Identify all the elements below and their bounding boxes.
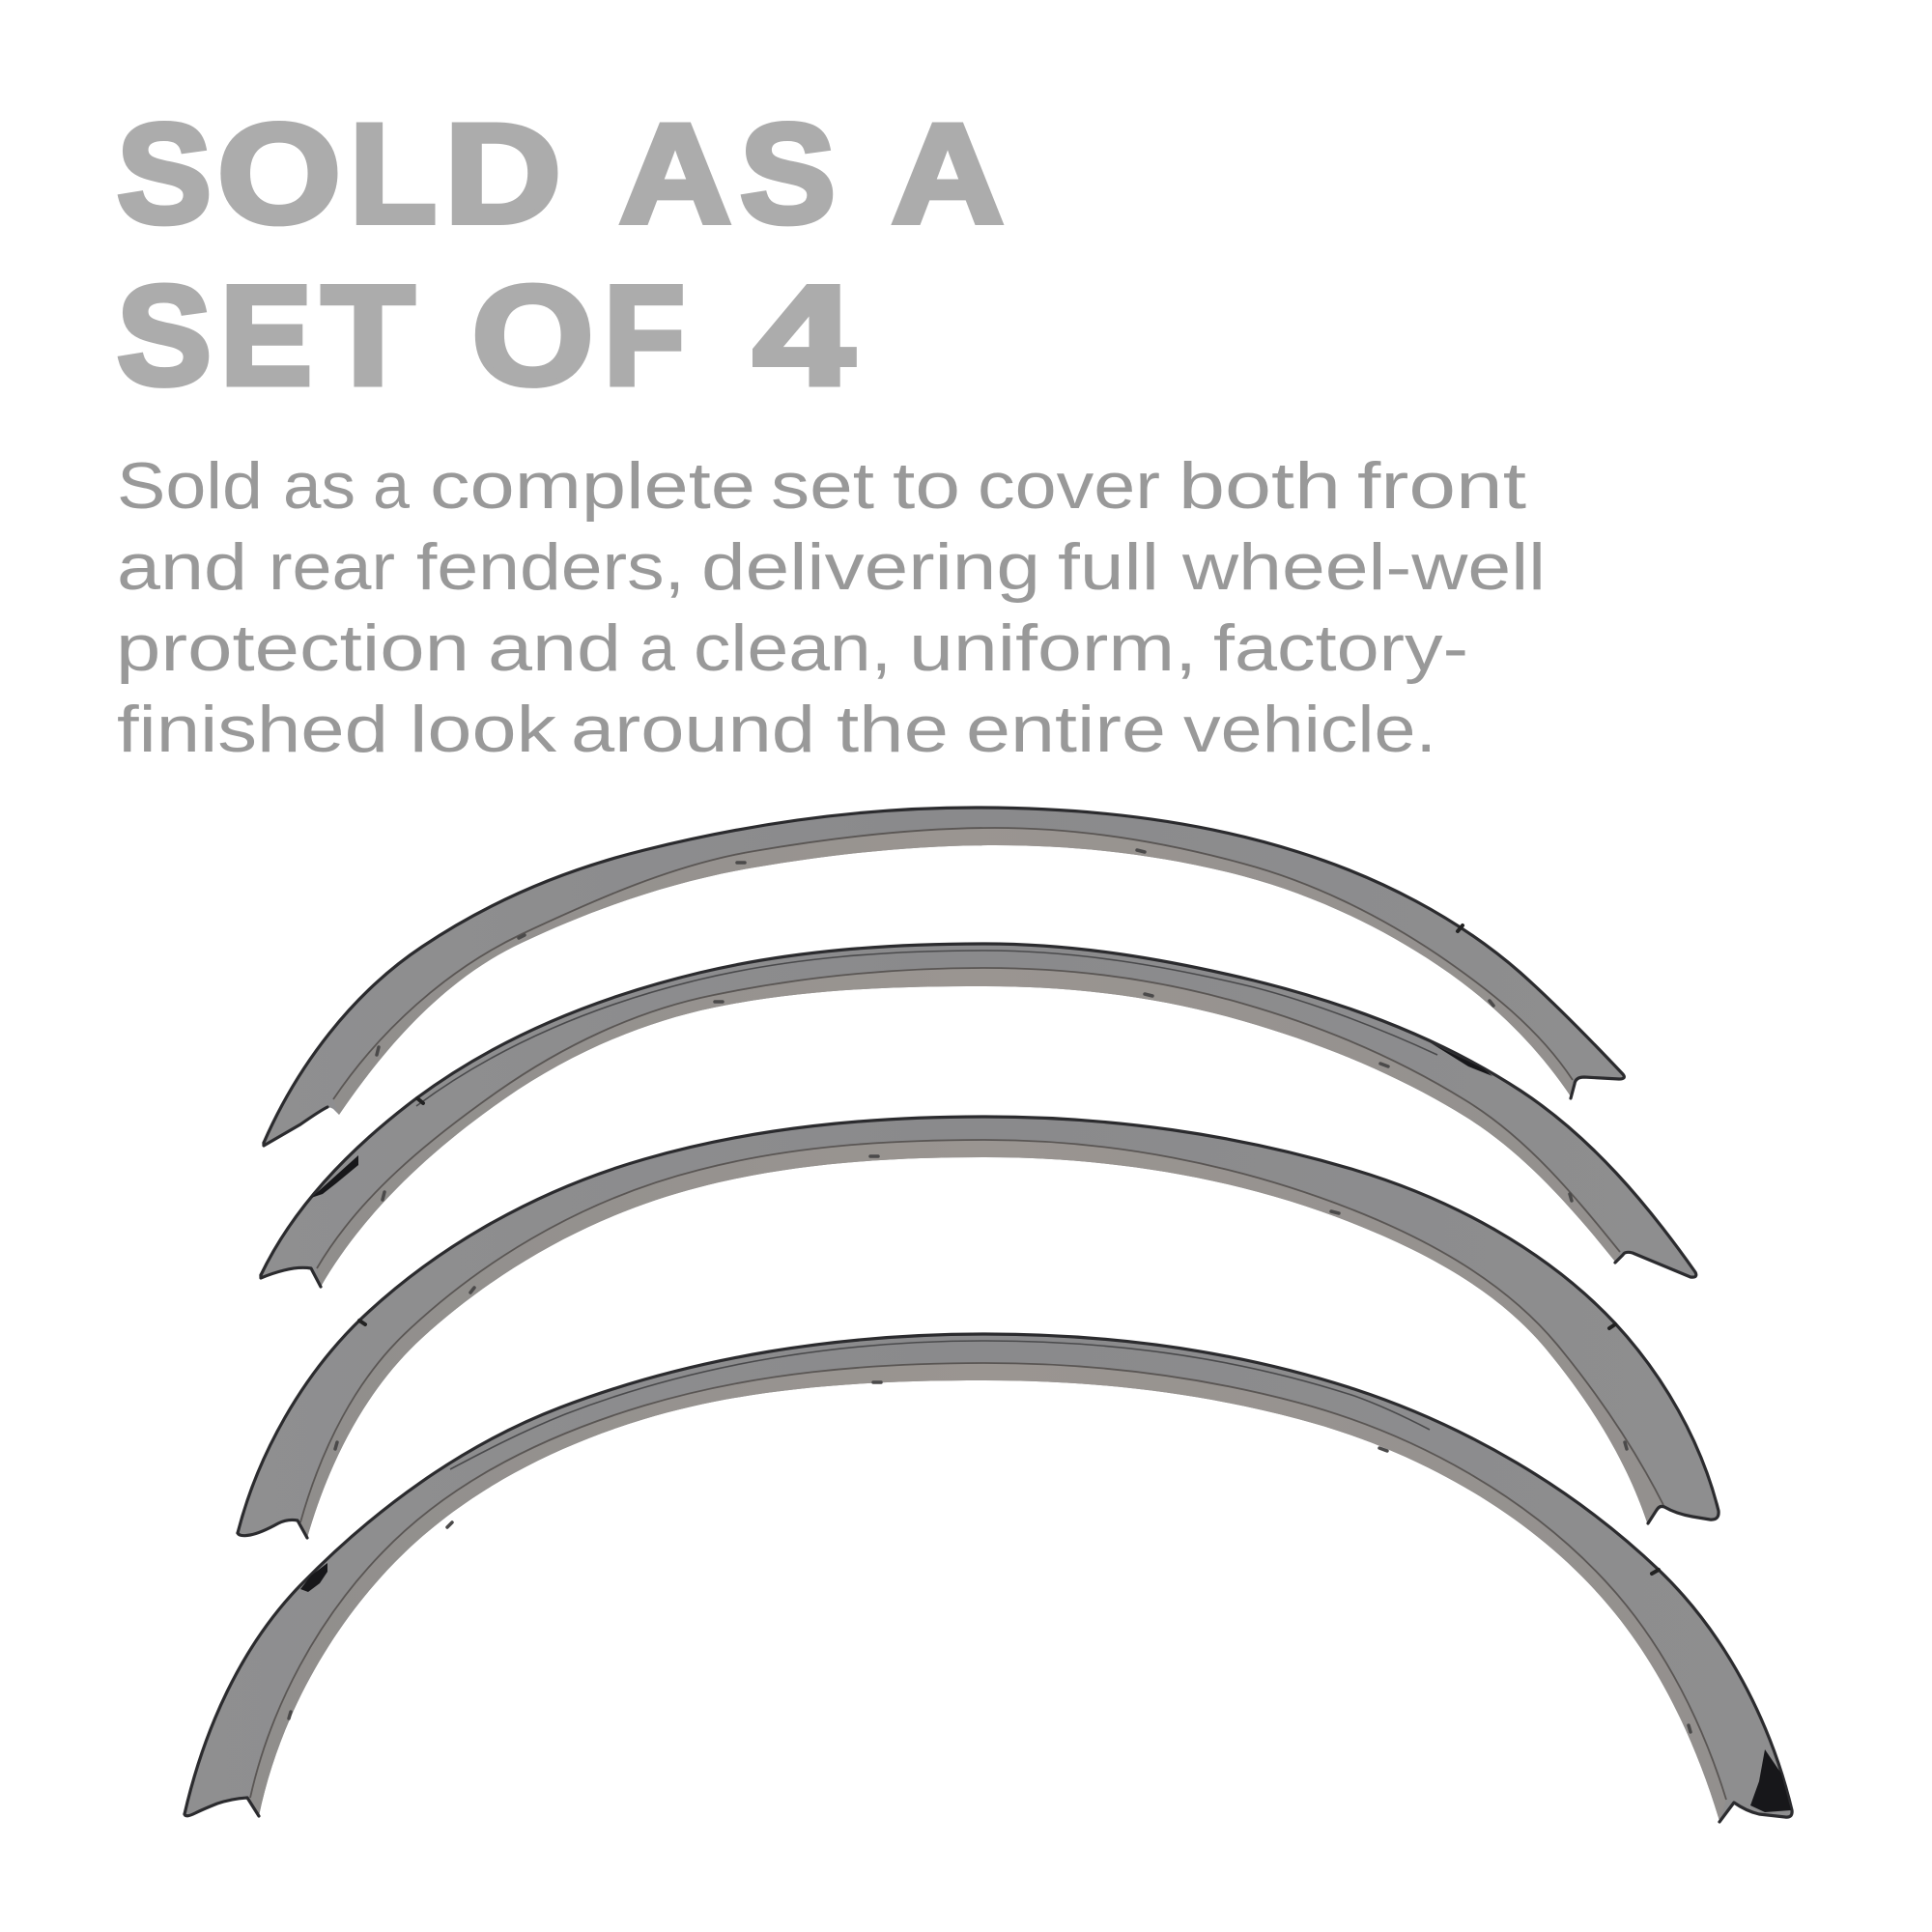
description text: fenders, [416, 530, 685, 604]
description text: look [410, 693, 557, 766]
description text: complete [430, 449, 755, 523]
fender trim 3 [238, 1117, 1719, 1538]
description text: uniform, [909, 611, 1197, 685]
title: S [117, 95, 212, 252]
title: S [740, 95, 836, 252]
description text: around [571, 693, 815, 766]
description text: front [1357, 449, 1526, 523]
title: S [117, 257, 212, 413]
title: L [350, 95, 437, 252]
description text: as [283, 449, 355, 523]
description text: Sold [117, 449, 263, 523]
description text: wheel-well [1181, 530, 1546, 604]
description text: finished [117, 693, 388, 766]
fender trim 4 [185, 1334, 1792, 1822]
title [117, 95, 1004, 413]
mounting clips on trim 1 [377, 850, 1493, 1055]
edge joint on trim 4 [1652, 1570, 1659, 1574]
title: O [471, 257, 593, 413]
title: F [604, 257, 685, 413]
title: E [220, 257, 312, 413]
edge joints on trim 3 [359, 1321, 1615, 1328]
description text: full [1058, 530, 1159, 604]
description text [116, 449, 1546, 766]
description text: vehicle. [1183, 693, 1436, 766]
description text: delivering [701, 530, 1040, 604]
title: O [217, 95, 341, 252]
mounting clips on trim 2 [383, 994, 1572, 1201]
edge joint on trim 2 [417, 1098, 423, 1103]
description text: and [117, 530, 247, 604]
edge joint on trim 1 [1458, 925, 1463, 931]
title: T [322, 257, 414, 413]
description text: factory- [1213, 611, 1468, 685]
title: A [892, 95, 1004, 252]
description text: and [488, 611, 621, 685]
fender trim 1 [264, 808, 1624, 1146]
glossy reflections on trim 2 [311, 1042, 1492, 1198]
description text: the [837, 693, 949, 766]
title: 4 [753, 257, 854, 413]
fender trim 2 [261, 944, 1696, 1287]
description text: both [1179, 449, 1341, 523]
description text: a [373, 449, 410, 523]
description text: set [771, 449, 874, 523]
title: D [444, 95, 561, 252]
glossy reflections on trim 4 [300, 1563, 1791, 1812]
description text: clean, [694, 611, 892, 685]
title: A [619, 95, 731, 252]
description text: protection [116, 611, 469, 685]
description text: to [893, 449, 960, 523]
description text: rear [269, 530, 395, 604]
mounting clips on trim 4 [289, 1382, 1690, 1732]
mounting clips on trim 3 [335, 1156, 1627, 1449]
description text: cover [978, 449, 1160, 523]
description text: entire [966, 693, 1166, 766]
description text: a [639, 611, 675, 685]
